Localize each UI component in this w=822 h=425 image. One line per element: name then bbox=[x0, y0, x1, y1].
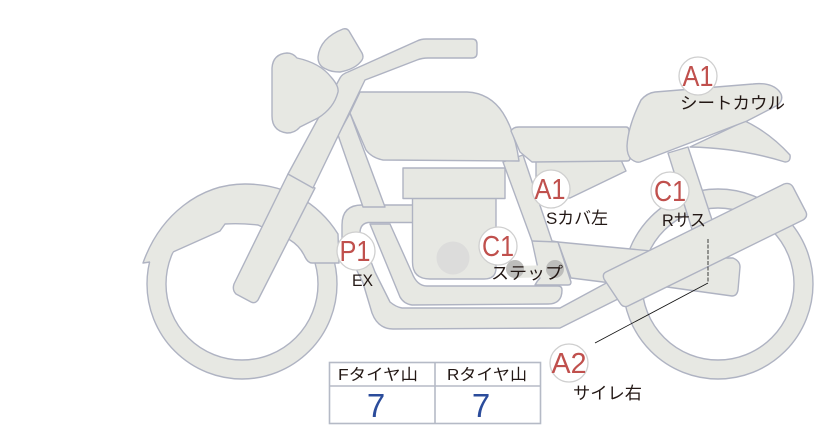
step pegs bbox=[506, 260, 564, 278]
callout: A2 muffler right bbox=[550, 344, 642, 403]
front fork lower bbox=[233, 174, 315, 303]
swingarm bbox=[558, 242, 740, 296]
rear frame tube bbox=[503, 155, 571, 285]
callout: A2 muffler right: A2 bbox=[552, 348, 586, 380]
tail cowl bbox=[627, 84, 782, 162]
motorcycle illustration bbox=[143, 29, 813, 379]
callout: C1 step bbox=[479, 227, 563, 283]
callout: A1 seat cowl: A1 bbox=[682, 61, 714, 93]
engine top block bbox=[403, 168, 505, 198]
front fender bbox=[143, 184, 339, 263]
rear tire value: 7 bbox=[472, 387, 490, 424]
front tire header: Fタイヤ山 bbox=[338, 366, 418, 384]
engine round cover bbox=[436, 242, 470, 274]
front fork upper and handlebar bbox=[288, 39, 477, 188]
headlight bbox=[272, 53, 338, 133]
callout: C1 rear suspension bbox=[651, 172, 706, 230]
callout: C1 rear suspension: Rサス bbox=[662, 211, 706, 230]
callout: P1 exhaust: EX bbox=[352, 271, 373, 290]
callout: A1 side cover left bbox=[532, 170, 608, 228]
leader line bbox=[595, 239, 708, 343]
front tire value: 7 bbox=[367, 387, 385, 424]
callout: A1 side cover left: Sカバ左 bbox=[546, 209, 608, 228]
fuel tank bbox=[350, 92, 519, 161]
rear wheel bbox=[623, 189, 813, 379]
seat bbox=[511, 127, 630, 162]
muffler bbox=[603, 183, 807, 307]
side cover bbox=[536, 160, 626, 198]
callout: A1 seat cowl: シートカウル bbox=[680, 94, 785, 113]
tire tread table bbox=[329, 362, 541, 424]
callout: A1 seat cowl bbox=[679, 57, 785, 113]
rear fender bbox=[690, 121, 790, 162]
meter bbox=[318, 29, 363, 72]
callout: C1 rear suspension: C1 bbox=[654, 176, 686, 208]
frame cradle tube bbox=[370, 224, 562, 305]
table grid bbox=[329, 362, 541, 424]
exhaust pipe bbox=[342, 205, 620, 329]
front frame tube bbox=[338, 113, 385, 207]
front wheel bbox=[147, 189, 337, 379]
rear shock bbox=[668, 147, 716, 242]
engine lower body bbox=[412, 197, 496, 279]
step plate top edge bbox=[532, 241, 558, 242]
callout: A1 side cover left: A1 bbox=[534, 174, 566, 206]
callout: P1 exhaust: P1 bbox=[340, 236, 370, 268]
callout: C1 step: ステップ bbox=[491, 264, 563, 283]
callout: C1 step: C1 bbox=[482, 231, 514, 263]
rear tire header: Rタイヤ山 bbox=[447, 366, 527, 384]
callout: A2 muffler right: サイレ右 bbox=[573, 384, 642, 403]
engine bbox=[403, 168, 505, 279]
callout: P1 exhaust bbox=[337, 232, 375, 290]
